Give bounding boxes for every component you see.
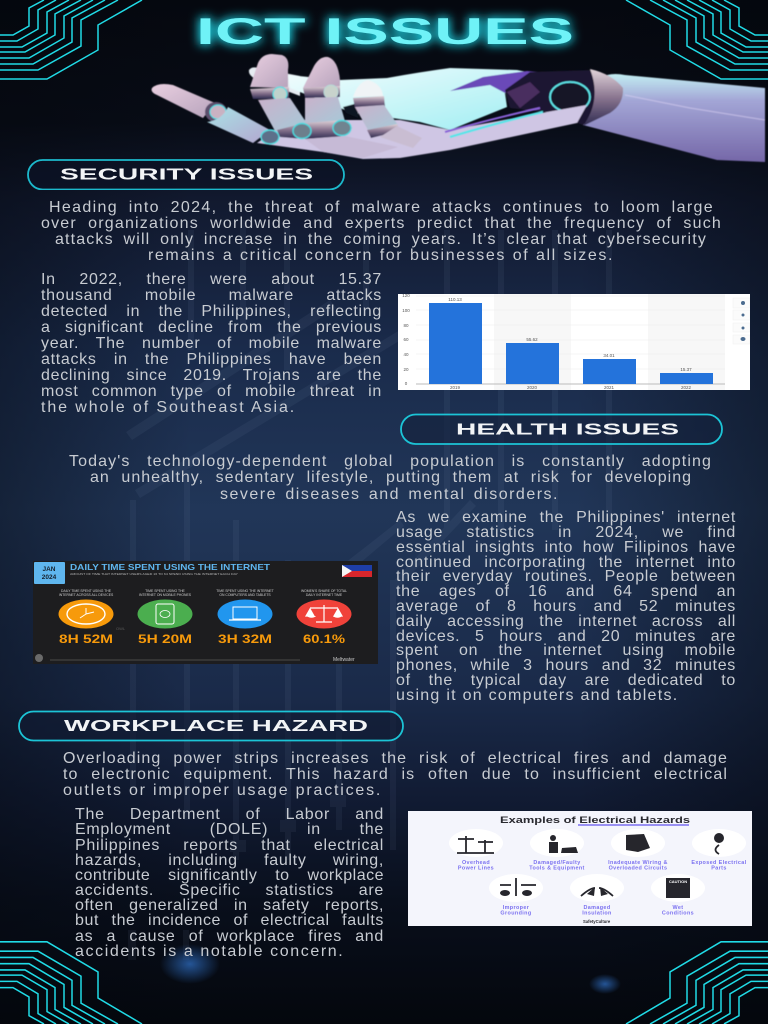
infographic: daily time spent using the internet: INTERNET ON MOBILE PHONES xyxy=(139,593,192,597)
infographic: daily time spent using the internet: DAILY TIME SPENT USING THE xyxy=(61,589,112,593)
bar chart: mobile malware attacks 2019-2022 xyxy=(398,294,750,390)
infographic: examples of electrical hazards: Improper xyxy=(503,905,530,911)
text block: health intro: severe diseases and mental disorders. xyxy=(220,486,559,503)
text block: DOLE electrical hazards: often generalized in safety reports, xyxy=(75,897,384,914)
infographic: daily time spent using the internet: JAN xyxy=(42,566,56,573)
bar chart: mobile malware attacks 2019-2022: 2021 xyxy=(604,385,615,390)
infographic: daily time spent using the internet: 8H 52M xyxy=(59,632,113,646)
text block: mobile malware in the Philippines: year. The number of mobile malware xyxy=(41,335,382,352)
index finger joint xyxy=(205,102,227,122)
text block: security intro: over organizations worldwide and experts predict that the frequency of such xyxy=(41,215,722,232)
text block: mobile malware in the Philippines: declining since 2019. Trojans are the xyxy=(41,367,382,384)
fourth finger xyxy=(353,80,383,97)
bar chart: mobile malware attacks 2019-2022: 2022 xyxy=(681,385,692,390)
text block: health intro: Today's technology-dependent global population is constantly adopting xyxy=(69,453,712,470)
flag xyxy=(342,565,372,571)
back thumb xyxy=(249,67,300,96)
text block: DOLE electrical hazards: accidents. Specific statistics are xyxy=(75,882,384,899)
forearm xyxy=(583,74,765,162)
heading pill: health issues xyxy=(400,414,723,445)
infographic: daily time spent using the internet xyxy=(33,561,378,664)
infographic: daily time spent using the internet: WOMEN'S SHARE OF TOTAL xyxy=(301,589,347,593)
second finger xyxy=(250,54,288,88)
text block: overloading power strips: Overloading power strips increases the risk of electrical fires and damage xyxy=(63,750,728,767)
illustration: robotic hand xyxy=(150,53,766,163)
text block: DOLE electrical hazards: as a cause of workplace fires and xyxy=(75,928,384,945)
text block: DOLE electrical hazards: hazards, including faulty wiring, xyxy=(75,852,384,869)
heading pill: workplace hazard: WORKPLACE HAZARD xyxy=(64,718,368,735)
bar chart: mobile malware attacks 2019-2022: 110.13 xyxy=(448,297,462,302)
text block: internet usage statistics: phones, while 3 hours and 32 minutes xyxy=(396,657,736,674)
text block: overloading power strips xyxy=(63,750,728,799)
text block: mobile malware in the Philippines: a significant decline from the previous xyxy=(41,319,382,336)
metal wrist collar xyxy=(583,69,623,126)
text block: DOLE electrical hazards: accidents is a notable concern. xyxy=(75,943,344,960)
infographic: examples of electrical hazards: Wet xyxy=(673,905,683,911)
text block: security intro: Heading into 2024, the threat of malware attacks continues to loom large xyxy=(49,199,714,216)
heading pill: security issues xyxy=(27,159,345,190)
infographic: daily time spent using the internet: DAILY TIME SPENT USING THE INTERNET xyxy=(70,562,271,572)
text block: internet usage statistics xyxy=(396,509,736,704)
bar chart: mobile malware attacks 2019-2022: 55.62 xyxy=(526,337,538,342)
text block: internet usage statistics: average of 8 hours and 52 minutes xyxy=(396,598,736,615)
infographic: examples of electrical hazards: Conditions xyxy=(662,910,694,916)
infographic: daily time spent using the internet: DAILY INTERNET TIME xyxy=(306,593,343,597)
bar chart: mobile malware attacks 2019-2022: 2020 xyxy=(527,385,538,390)
infographic: examples of electrical hazards: SafetyCulture xyxy=(583,919,611,924)
text block: internet usage statistics: spent on the internet using mobile xyxy=(396,642,736,659)
bar chart: mobile malware attacks 2019-2022: 80 xyxy=(403,323,409,328)
bar chart: mobile malware attacks 2019-2022: 40 xyxy=(403,352,409,357)
text block: security intro: remains a critical concern for businesses of all sizes. xyxy=(148,247,614,264)
knuckle band xyxy=(277,120,352,139)
bar chart: mobile malware attacks 2019-2022: 2019 xyxy=(450,385,461,390)
text block: health intro xyxy=(69,453,712,503)
purple flare xyxy=(450,71,560,93)
text block: health intro: an unhealthy, sedentary lifestyle, putting them at risk for developing xyxy=(90,469,692,486)
infographic: daily time spent using the internet: OWL xyxy=(116,626,126,631)
title: ICT ISSUES xyxy=(196,11,574,52)
infographic: examples of electrical hazards: Overhead xyxy=(462,860,490,866)
infographic: examples of electrical hazards: Parts xyxy=(711,866,727,872)
text block: DOLE electrical hazards: Employment (DOLE) in the xyxy=(75,821,384,838)
text block: internet usage statistics: continued incorporating the internet into xyxy=(396,554,736,571)
text block: mobile malware in the Philippines: detected in the Philippines, reflecting xyxy=(41,303,382,320)
text block: internet usage statistics: using it on computers and tablets. xyxy=(396,687,678,704)
text block: overloading power strips: to electronic equipment. This hazard is often due to insufficient electrical xyxy=(63,766,728,783)
index finger middle xyxy=(207,107,270,143)
infographic: daily time spent using the internet: TIME SPENT USING THE INTERNET xyxy=(216,589,274,593)
text block: mobile malware in the Philippines: thousand mobile malware attacks xyxy=(41,287,382,304)
infographic: examples of electrical hazards: Exposed Electrical xyxy=(691,860,747,866)
text block: DOLE electrical hazards xyxy=(75,806,384,960)
title: ICT ISSUES xyxy=(196,11,574,52)
infographic: daily time spent using the internet: 60.1% xyxy=(303,632,345,646)
text block: internet usage statistics: devices. 5 hours and 20 minutes are xyxy=(396,628,736,645)
title xyxy=(190,9,580,54)
infographic: examples of electrical hazards: Examples of Electrical Hazards xyxy=(500,815,690,826)
text block: overloading power strips: outlets or improper usage practices. xyxy=(63,782,382,799)
infographic: examples of electrical hazards: CAUTION xyxy=(669,879,687,884)
dark socket xyxy=(505,70,606,125)
infographic: examples of electrical hazards: Tools & Equipment xyxy=(529,866,585,872)
infographic: daily time spent using the internet: 5H 20M xyxy=(138,632,192,646)
text block: DOLE electrical hazards: The Department of Labor and xyxy=(75,806,384,823)
text block: mobile malware in the Philippines xyxy=(41,271,382,416)
text block: mobile malware in the Philippines: In 2022, there were about 15.37 xyxy=(41,271,382,288)
infographic: daily time spent using the internet: TIME SPENT USING THE xyxy=(145,589,186,593)
text block: internet usage statistics: As we examine the Philippines' internet xyxy=(396,509,736,526)
text block: internet usage statistics: usage statistics in 2024, we find xyxy=(396,524,736,541)
text block: internet usage statistics: the ages of 16 and 64 spend an xyxy=(396,583,736,600)
third finger xyxy=(303,57,340,88)
infographic: examples of electrical hazards: Grounding xyxy=(500,910,532,916)
text block: DOLE electrical hazards: contribute significantly to workplace xyxy=(75,867,384,884)
infographic: daily time spent using the internet: ON COMPUTERS AND TABLETS xyxy=(219,593,271,597)
text block: security intro xyxy=(41,199,722,264)
infographic: examples of electrical hazards: Damaged xyxy=(583,905,611,911)
lower palm xyxy=(257,105,587,159)
infographic: examples of electrical hazards: Damaged/Faulty xyxy=(533,860,581,866)
text block: DOLE electrical hazards: but the incidence of electrical faults xyxy=(75,912,384,929)
bar chart: mobile malware attacks 2019-2022: 60 xyxy=(403,337,409,342)
infographic: examples of electrical hazards xyxy=(408,811,752,926)
bar chart: mobile malware attacks 2019-2022: 34.01 xyxy=(603,353,615,358)
text block: DOLE electrical hazards: Philippines reports that electrical xyxy=(75,837,384,854)
heading pill: workplace hazard xyxy=(18,710,404,742)
index finger tip xyxy=(152,84,215,118)
text block: internet usage statistics: their everyday routines. People between xyxy=(396,568,736,585)
bar chart: mobile malware attacks 2019-2022: 20 xyxy=(403,367,409,372)
infographic: daily time spent using the internet: AMOUNT OF TIME THAT INTERNET USERS AGED 16 TO 64 SPEND USING THE INTERNET EACH DAY xyxy=(70,572,238,576)
infographic: daily time spent using the internet: 3H 32M xyxy=(218,632,272,646)
text block: mobile malware in the Philippines: the whole of Southeast Asia. xyxy=(41,399,296,416)
upper palm xyxy=(288,68,527,130)
bar chart: mobile malware attacks 2019-2022: 100 xyxy=(402,308,410,313)
infographic: daily time spent using the internet: INTERNET ACROSS ALL DEVICES xyxy=(59,593,114,597)
infographic: examples of electrical hazards: Inadequate Wiring & xyxy=(608,860,668,866)
text block: internet usage statistics: of the typical day are dedicated to xyxy=(396,672,736,689)
text block: internet usage statistics: daily accessing the internet across all xyxy=(396,613,736,630)
text block: security intro: attacks will only increase in the coming years. It’s clear that cybersecurity xyxy=(55,231,707,248)
date badge xyxy=(34,562,65,584)
text block: mobile malware in the Philippines: most common type of mobile threat in xyxy=(41,383,382,400)
infographic: daily time spent using the internet: 2024 xyxy=(42,574,57,581)
infographic: daily time spent using the internet: Meltwater xyxy=(333,657,355,663)
infographic: examples of electrical hazards: Insulation xyxy=(582,910,612,916)
bar chart: mobile malware attacks 2019-2022: 0 xyxy=(405,381,408,386)
dark gap between fingers xyxy=(343,103,358,118)
infographic: examples of electrical hazards: Overloaded Circuits xyxy=(609,866,667,872)
heading pill: health issues: HEALTH ISSUES xyxy=(456,422,679,438)
infographic: examples of electrical hazards: Power Lines xyxy=(458,866,494,872)
text block: mobile malware in the Philippines: attacks in the Philippines have been xyxy=(41,351,382,368)
heading pill: security issues: SECURITY ISSUES xyxy=(60,166,313,184)
bar chart: mobile malware attacks 2019-2022: 15.37 xyxy=(680,367,692,372)
text block: internet usage statistics: essential insights into how Filipinos have xyxy=(396,539,736,556)
